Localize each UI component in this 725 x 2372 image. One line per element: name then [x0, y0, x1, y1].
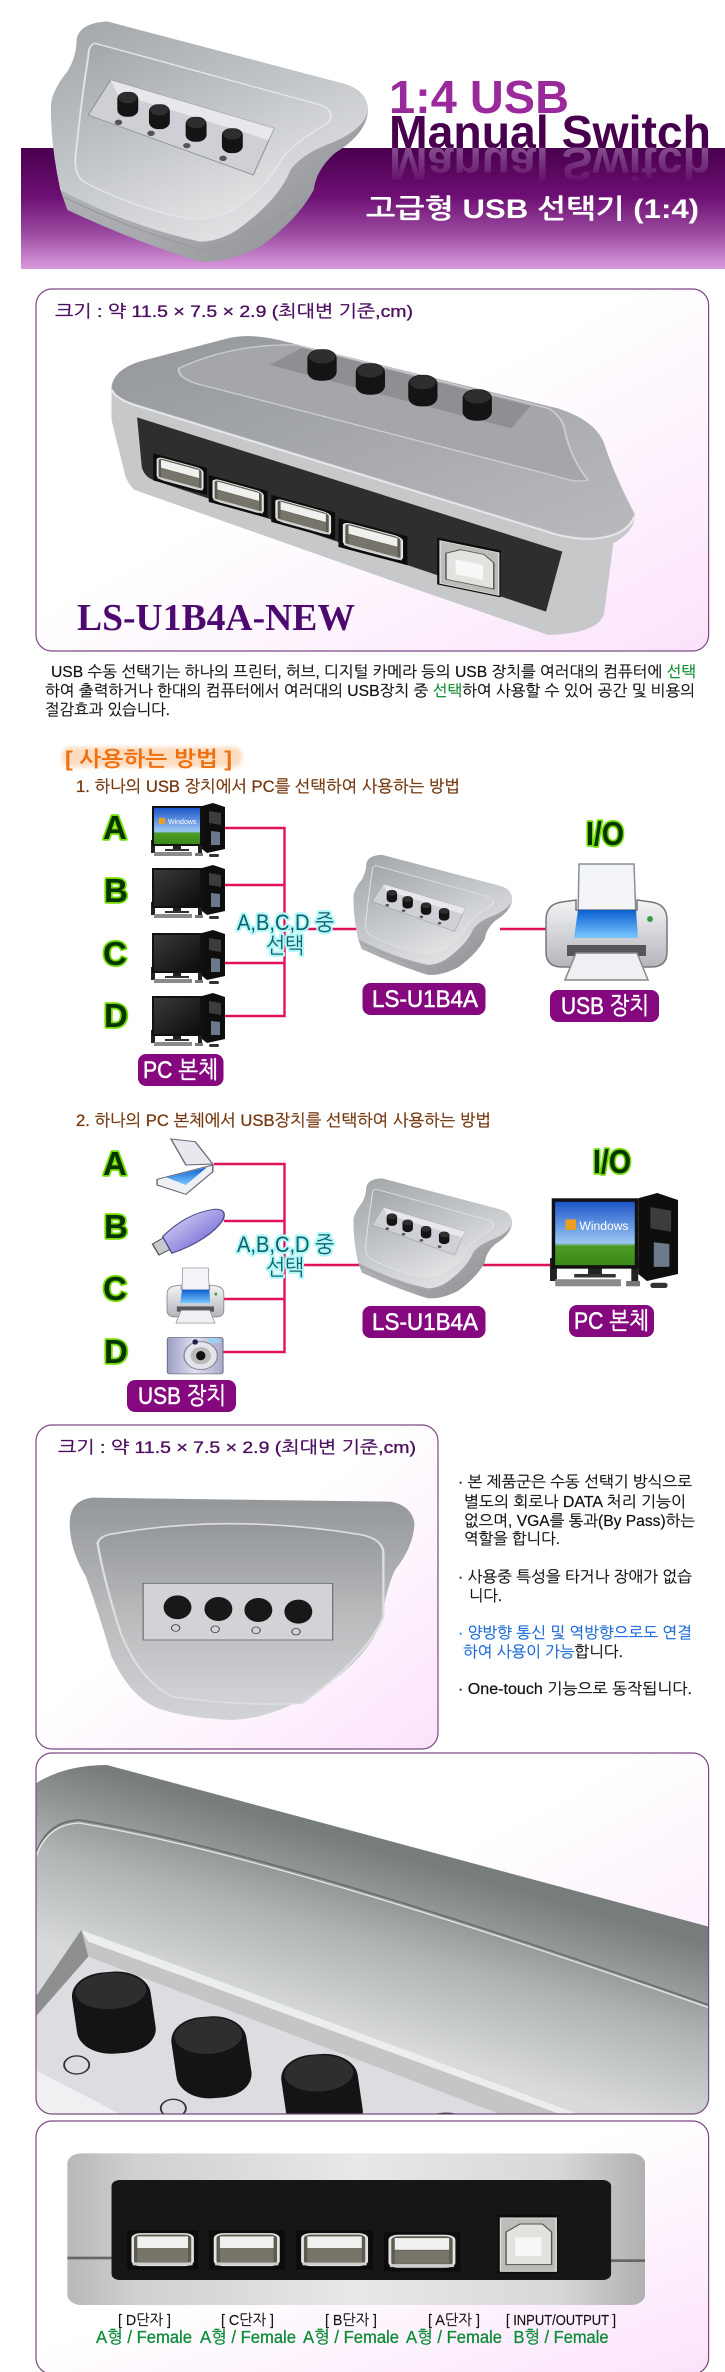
feature list: 별도의 회로나 DATA 처리 기능이 — [464, 1494, 686, 1511]
title: 1:4 USB: 1:4 USB — [389, 71, 569, 123]
I/O label: I/O — [593, 1143, 631, 1180]
selection label — [237, 1232, 334, 1280]
method 1 heading: 1. 하나의 USB 장치에서 PC를 선택하여 사용하는 방법 — [76, 778, 460, 796]
port labels: [ D단자 ] — [118, 2312, 171, 2329]
I/O label: I/O — [586, 815, 624, 852]
feature list: · One-touch 기능으로 동작됩니다. — [458, 1681, 692, 1698]
selection label: 선택 — [266, 933, 304, 958]
description paragraph: 하여 출력하거나 한대의 컴퓨터에서 여러대의 USB장치 중 선택하여 사용할 수 있어 공간 및 비용의 — [45, 683, 695, 700]
selection label: A,B,C,D 중 — [237, 910, 334, 935]
icon: PC A — [151, 803, 225, 857]
letter C: C — [103, 1270, 127, 1307]
port labels: [ A단자 ] — [428, 2312, 480, 2329]
panel: port view — [36, 2121, 709, 2372]
banner band — [21, 148, 725, 269]
size label: 크기 : 약 11.5 × 7.5 × 2.9 (최대변 기준,cm) — [55, 302, 413, 321]
selection label: A,B,C,D 중 — [237, 1232, 334, 1257]
product photo: USB switch rear three-quarter — [112, 336, 635, 635]
label: PC body: PC 본체 — [574, 1308, 649, 1335]
connector lines — [214, 1164, 551, 1352]
method 2 heading: 2. 하나의 PC 본체에서 USB장치를 선택하여 사용하는 방법 — [76, 1112, 491, 1130]
label: LS-U1B4A: LS-U1B4A — [372, 986, 478, 1013]
feature list — [458, 1473, 695, 1698]
connector type labels: A형 / Female — [303, 2327, 399, 2347]
icon: small printer — [167, 1268, 224, 1323]
letter D: D — [104, 997, 128, 1034]
icon: PC B — [151, 865, 225, 919]
switch device — [354, 855, 512, 975]
letter B: B — [104, 1208, 128, 1245]
section heading: how to use: [ 사용하는 방법 ] — [65, 748, 232, 771]
connector type labels: B형 / Female — [514, 2327, 608, 2347]
connector type labels: A형 / Female — [200, 2327, 296, 2347]
product photo: port side — [67, 2153, 645, 2305]
label: LS-U1B4A: LS-U1B4A — [372, 1309, 478, 1336]
diagram 1: one USB device to multiple PCs — [103, 803, 667, 1086]
feature list: 역할을 합니다. — [464, 1530, 560, 1548]
title: Manual Switch: Manual Switch — [389, 106, 711, 158]
connector type labels — [96, 2327, 608, 2347]
subtitle: 고급형 USB 선택기 (1:4) — [366, 194, 699, 224]
feature list: · 사용중 특성을 타거나 장애가 없습 — [458, 1568, 692, 1586]
product photo: top view — [70, 1498, 415, 1720]
model name: LS-U1B4A-NEW — [77, 597, 355, 639]
letter A: A — [103, 809, 127, 846]
panel: top view — [36, 1425, 438, 1749]
feature list: 하여 사용이 가능합니다. — [463, 1643, 623, 1661]
letter A: A — [103, 1145, 127, 1182]
icon: PC A: Windows — [168, 819, 197, 826]
icon: printer — [546, 864, 667, 980]
description paragraph: USB 수동 선택기는 하나의 프린터, 허브, 디지털 카메라 등의 USB 장치를 여러대의 컴퓨터에 선택 — [51, 664, 696, 681]
port labels: [ INPUT/OUTPUT ] — [506, 2312, 616, 2329]
feature list: · 양방향 통신 및 역방향으로도 연결 — [458, 1624, 692, 1642]
size label: 크기 : 약 11.5 × 7.5 × 2.9 (최대변 기준,cm) — [58, 1438, 416, 1457]
label: USB device: USB 장치 — [138, 1383, 226, 1410]
feature list: · 본 제품군은 수동 선택기 방식으로 — [458, 1473, 692, 1491]
letter C: C — [103, 935, 127, 972]
selection label: 선택 — [266, 1255, 304, 1280]
feature list: 니다. — [469, 1588, 502, 1605]
port labels: [ C단자 ] — [221, 2312, 274, 2329]
description paragraph: 절감효과 있습니다. — [45, 701, 170, 719]
icon: USB stick — [152, 1209, 224, 1255]
selection label — [237, 910, 334, 958]
title reflection: Manual Switch — [389, 138, 711, 190]
hero product photo — [51, 22, 368, 262]
description paragraph — [45, 664, 696, 719]
label: USB device: USB 장치 — [561, 993, 649, 1020]
diagram 2: one PC to multiple USB devices — [103, 1139, 678, 1412]
feature list: 없으며, VGA를 통과(By Pass)하는 — [464, 1513, 695, 1530]
icon: PC C — [151, 930, 225, 984]
close-up product photo — [36, 1765, 709, 2138]
letter B: B — [104, 872, 128, 909]
icon: desktop PC — [550, 1193, 678, 1288]
switch device — [354, 1178, 512, 1298]
icon: scanner — [157, 1139, 213, 1194]
letter D: D — [104, 1333, 128, 1370]
icon: camera — [167, 1337, 223, 1374]
connector lines — [224, 828, 546, 1016]
icon: PC D — [151, 993, 225, 1047]
port labels: [ B단자 ] — [325, 2312, 377, 2329]
connector type labels: A형 / Female — [406, 2327, 502, 2347]
port labels — [118, 2312, 616, 2329]
connector type labels: A형 / Female — [96, 2327, 192, 2347]
label: PC body: PC 본체 — [143, 1057, 218, 1084]
icon: desktop PC: Windows — [579, 1219, 628, 1233]
panel: close-up of buttons — [36, 1753, 709, 2138]
panel: product angle view — [36, 289, 709, 651]
